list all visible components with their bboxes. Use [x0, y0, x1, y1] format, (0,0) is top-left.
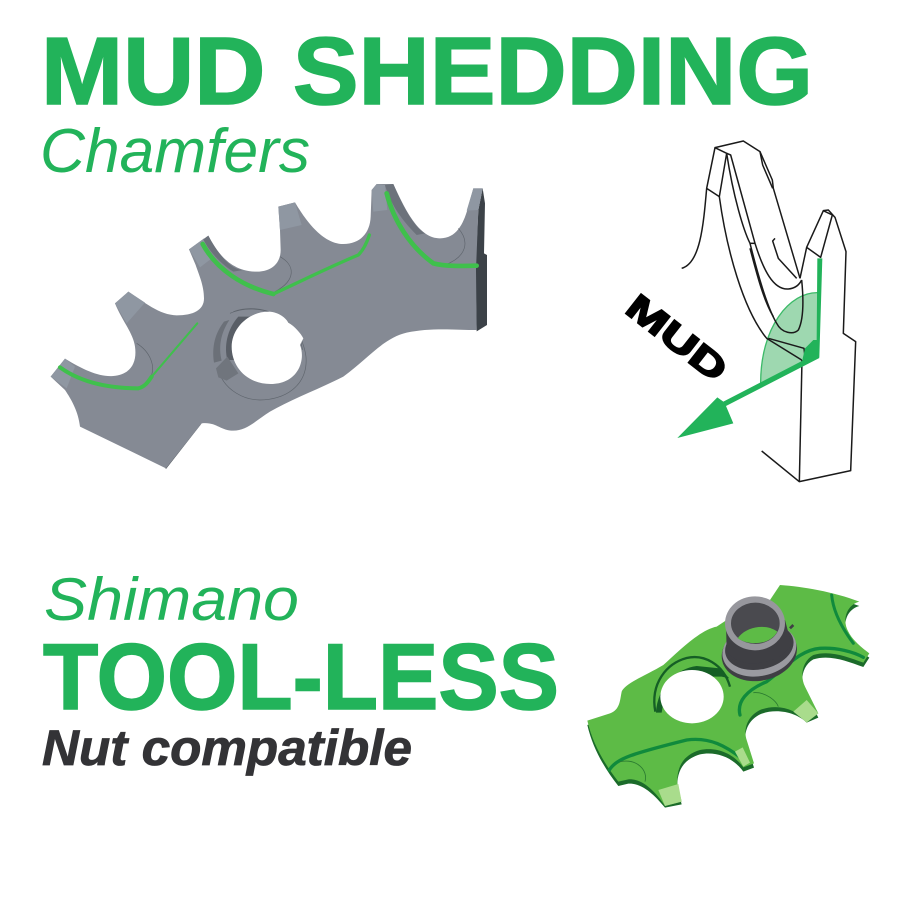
light tooth tip facets	[658, 700, 818, 806]
nut body	[726, 620, 792, 663]
recess outlines	[620, 693, 778, 782]
recess outlines	[137, 228, 465, 400]
green chamfer lines	[60, 193, 477, 388]
green plate body	[587, 585, 869, 806]
heading: tool-less: TOOL-LESS	[43, 624, 559, 729]
gray flanged nut	[716, 596, 802, 688]
subheading: chamfers: Chamfers	[40, 117, 310, 186]
gray chainring segment with green chamfers	[51, 184, 487, 469]
tooth outlines	[682, 141, 856, 482]
dark side faces	[163, 188, 487, 469]
green seen through bore	[738, 627, 777, 643]
dark green side walls	[587, 589, 869, 808]
green corner fill and vertical line	[801, 258, 822, 366]
hole recess shading	[654, 657, 730, 712]
nut rim	[725, 596, 785, 650]
heading: mud shedding: MUD SHEDDING	[41, 18, 813, 125]
tooth line diagram with mud arrow	[618, 141, 856, 482]
text: nut compatible: Nut compatible	[42, 720, 412, 776]
nut flange	[717, 617, 801, 683]
axle hole	[213, 312, 303, 384]
green chainring segment with gray nut	[587, 585, 869, 808]
hole opening	[232, 312, 303, 384]
mud label: MUD	[618, 286, 736, 390]
tooth tip facets	[51, 184, 483, 388]
nut flange top	[721, 617, 798, 676]
shaded angle sector	[761, 293, 818, 385]
hole recess shading	[213, 320, 229, 363]
tooth flank shading	[203, 184, 425, 272]
nut bore	[731, 603, 780, 644]
dark green chamfer lines	[609, 595, 863, 770]
subheading: shimano: Shimano	[44, 566, 299, 633]
hole opening	[660, 670, 724, 723]
nut flange shadow	[716, 617, 802, 688]
axle hole	[654, 657, 730, 723]
green mud arrow	[677, 353, 819, 438]
plate body	[51, 184, 483, 468]
nut notches	[732, 625, 793, 664]
